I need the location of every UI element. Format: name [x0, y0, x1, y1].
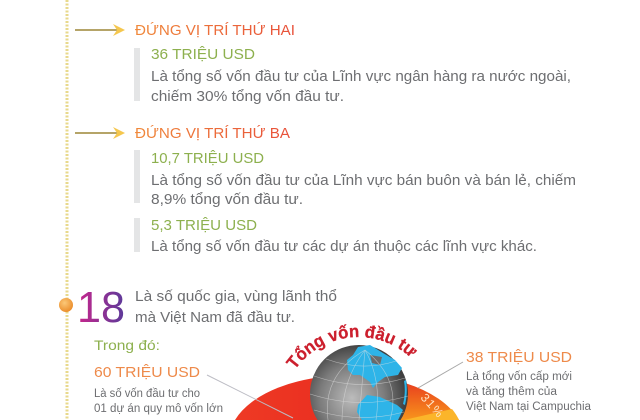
arrow: third place	[75, 127, 125, 139]
text block: 36 million: Là tổng số vốn đầu tư của Lĩnh vực ngân hàng ra nước ngoài,	[151, 69, 571, 85]
arrow: second place	[75, 24, 125, 36]
globe	[310, 345, 408, 420]
text block: 18 countries: mà Việt Nam đã đầu tư.	[135, 310, 295, 326]
callout: 60 million	[94, 364, 223, 415]
heading: third place: ĐỨNG VỊ TRÍ THỨ BA	[135, 125, 290, 142]
text block: 10.7 million: Là tổng số vốn đầu tư của Lĩnh vực bán buôn và bán lẻ, chiếm	[151, 173, 576, 189]
callout: 38 million	[466, 349, 592, 413]
pie label: 31%	[418, 391, 446, 420]
timeline marker	[59, 298, 73, 312]
text block: 36 million	[151, 46, 571, 105]
callout: 38 million: Việt Nam tại Campuchia	[466, 401, 592, 413]
callout: 60 million: 01 dự án quy mô vốn lớn	[94, 403, 223, 415]
bar: second place	[134, 48, 140, 101]
text block: 36 million: 36 TRIỆU USD	[151, 46, 255, 63]
number 18: 18	[77, 283, 125, 332]
callout: 60 million: 60 TRIỆU USD	[94, 364, 200, 381]
callout: 38 million: và tăng thêm của	[466, 386, 558, 398]
bar: 10.7 million	[134, 150, 140, 203]
text block: 10.7 million: 8,9% tổng vốn đầu tư.	[151, 192, 303, 208]
callout: 38 million: Là tổng vốn cấp mới	[466, 371, 572, 383]
callout: 60 million: Là số vốn đầu tư cho	[94, 388, 200, 400]
heading: second place: ĐỨNG VỊ TRÍ THỨ HAI	[135, 22, 295, 39]
pie chart	[235, 375, 459, 420]
text block: 10.7 million: 10,7 TRIỆU USD	[151, 150, 264, 167]
callout: 38 million: 38 TRIỆU USD	[466, 349, 572, 366]
text block: 18 countries: Là số quốc gia, vùng lãnh thổ	[135, 289, 337, 305]
text block: 10.7 million	[151, 150, 576, 208]
bar: 5.3 million	[134, 218, 140, 252]
text block: 18 countries	[135, 289, 337, 326]
connector: 60 million	[207, 375, 293, 418]
text block: 5.3 million: Là tổng số vốn đầu tư các dự án thuộc các lĩnh vực khác.	[151, 239, 537, 255]
text block: 5.3 million	[151, 217, 537, 255]
label: among which: Trong đó:	[94, 337, 160, 353]
timeline dotted line	[66, 0, 68, 420]
curved title: total investment: Tổng vốn đầu tư	[285, 324, 418, 368]
connector: 38 million	[418, 362, 463, 388]
text block: 36 million: chiếm 30% tổng vốn đầu tư.	[151, 89, 344, 105]
text block: 5.3 million: 5,3 TRIỆU USD	[151, 217, 257, 234]
